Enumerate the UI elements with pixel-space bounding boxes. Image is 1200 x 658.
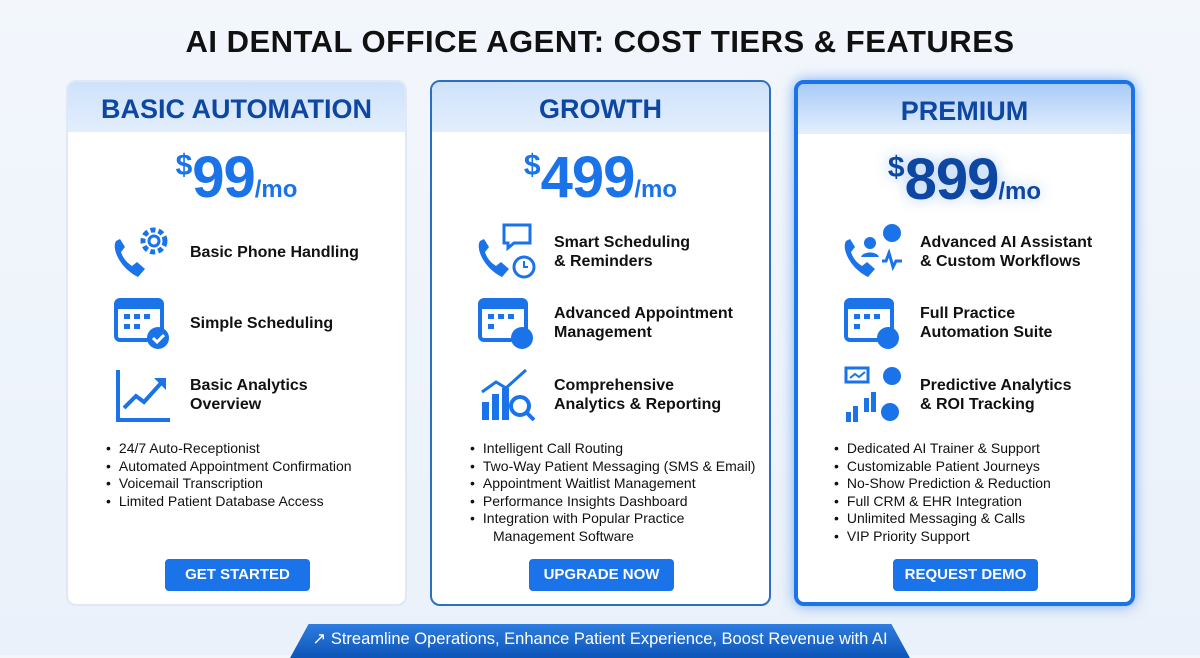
heading: premium: PREMIUM bbox=[901, 96, 1028, 126]
feature: AI assistant bbox=[844, 224, 1092, 277]
heading: basic: BASIC AUTOMATION bbox=[101, 94, 372, 124]
price: $899: $899/mo bbox=[888, 147, 1041, 212]
feature list: Customizable Patient Journeys bbox=[847, 458, 1040, 474]
heading: premium bbox=[798, 84, 1131, 134]
feature list bbox=[834, 440, 1051, 544]
feature: analytics: Basic Analytics bbox=[190, 377, 308, 394]
feature: automation suite: Automation Suite bbox=[920, 324, 1052, 341]
feature list: Integration with Popular Practice bbox=[483, 510, 684, 526]
feature: predictive analytics bbox=[844, 366, 1071, 422]
panel: premium bbox=[794, 80, 1135, 606]
feature: automation suite: Full Practice bbox=[920, 305, 1015, 322]
feature: phone handling bbox=[114, 228, 359, 277]
feature: automation suite bbox=[844, 298, 1052, 349]
button: upgrade now bbox=[529, 559, 674, 591]
feature: appointment management bbox=[478, 298, 733, 349]
feature: analytics reporting: Comprehensive bbox=[554, 377, 674, 394]
button: get started: GET STARTED bbox=[185, 566, 290, 583]
feature list: Performance Insights Dashboard bbox=[483, 493, 688, 509]
feature list: Automated Appointment Confirmation bbox=[119, 458, 352, 474]
feature: analytics reporting bbox=[481, 368, 721, 422]
feature list: Dedicated AI Trainer & Support bbox=[847, 440, 1040, 456]
feature: AI assistant: Advanced AI Assistant bbox=[920, 234, 1092, 251]
feature: smart scheduling: Smart Scheduling bbox=[554, 234, 690, 251]
feature: smart scheduling bbox=[478, 224, 690, 278]
feature: scheduling bbox=[114, 298, 333, 349]
feature: scheduling: Simple Scheduling bbox=[190, 314, 333, 332]
price: $499: $499/mo bbox=[524, 145, 677, 210]
feature list: Unlimited Messaging & Calls bbox=[847, 510, 1025, 526]
feature list: VIP Priority Support bbox=[847, 528, 970, 544]
panel: basic automation bbox=[66, 80, 407, 606]
feature: appointment management: Advanced Appointment bbox=[554, 305, 733, 322]
heading: growth: GROWTH bbox=[539, 94, 662, 124]
feature list: No-Show Prediction & Reduction bbox=[847, 475, 1051, 491]
feature list: Intelligent Call Routing bbox=[483, 440, 623, 456]
feature: smart scheduling: & Reminders bbox=[554, 253, 653, 270]
feature list: Full CRM & EHR Integration bbox=[847, 493, 1022, 509]
feature: analytics: Overview bbox=[190, 396, 261, 413]
heading: growth bbox=[432, 82, 769, 132]
panel: growth bbox=[430, 80, 771, 606]
feature list: Two-Way Patient Messaging (SMS & Email) bbox=[483, 458, 755, 474]
banner: tagline bbox=[290, 624, 910, 658]
feature list: Voicemail Transcription bbox=[119, 475, 263, 491]
feature list: Appointment Waitlist Management bbox=[483, 475, 696, 491]
button: request demo: REQUEST DEMO bbox=[905, 566, 1026, 583]
feature list bbox=[106, 440, 352, 509]
feature: analytics bbox=[116, 370, 308, 422]
price: $99: $99/mo bbox=[176, 145, 297, 210]
feature: appointment management: Management bbox=[554, 324, 652, 341]
feature list bbox=[470, 440, 755, 544]
feature: predictive analytics: Predictive Analytics bbox=[920, 377, 1071, 394]
title: AI DENTAL OFFICE AGENT: COST TIERS & FEATURES bbox=[185, 24, 1015, 59]
feature list: Management Software bbox=[493, 528, 634, 544]
heading: basic bbox=[68, 82, 405, 132]
feature list: 24/7 Auto-Receptionist bbox=[119, 440, 260, 456]
feature: AI assistant: & Custom Workflows bbox=[920, 253, 1081, 270]
banner: tagline: ↗ Streamline Operations, Enhance Patient Experience, Boost Revenue with AI bbox=[312, 630, 888, 648]
button: request demo bbox=[893, 559, 1038, 591]
feature: predictive analytics: & ROI Tracking bbox=[920, 396, 1035, 413]
feature list: Limited Patient Database Access bbox=[119, 493, 324, 509]
feature: phone handling: Basic Phone Handling bbox=[190, 244, 359, 260]
button: get started bbox=[165, 559, 310, 591]
feature: analytics reporting: Analytics & Reporting bbox=[554, 396, 721, 413]
button: upgrade now: UPGRADE NOW bbox=[544, 566, 659, 583]
